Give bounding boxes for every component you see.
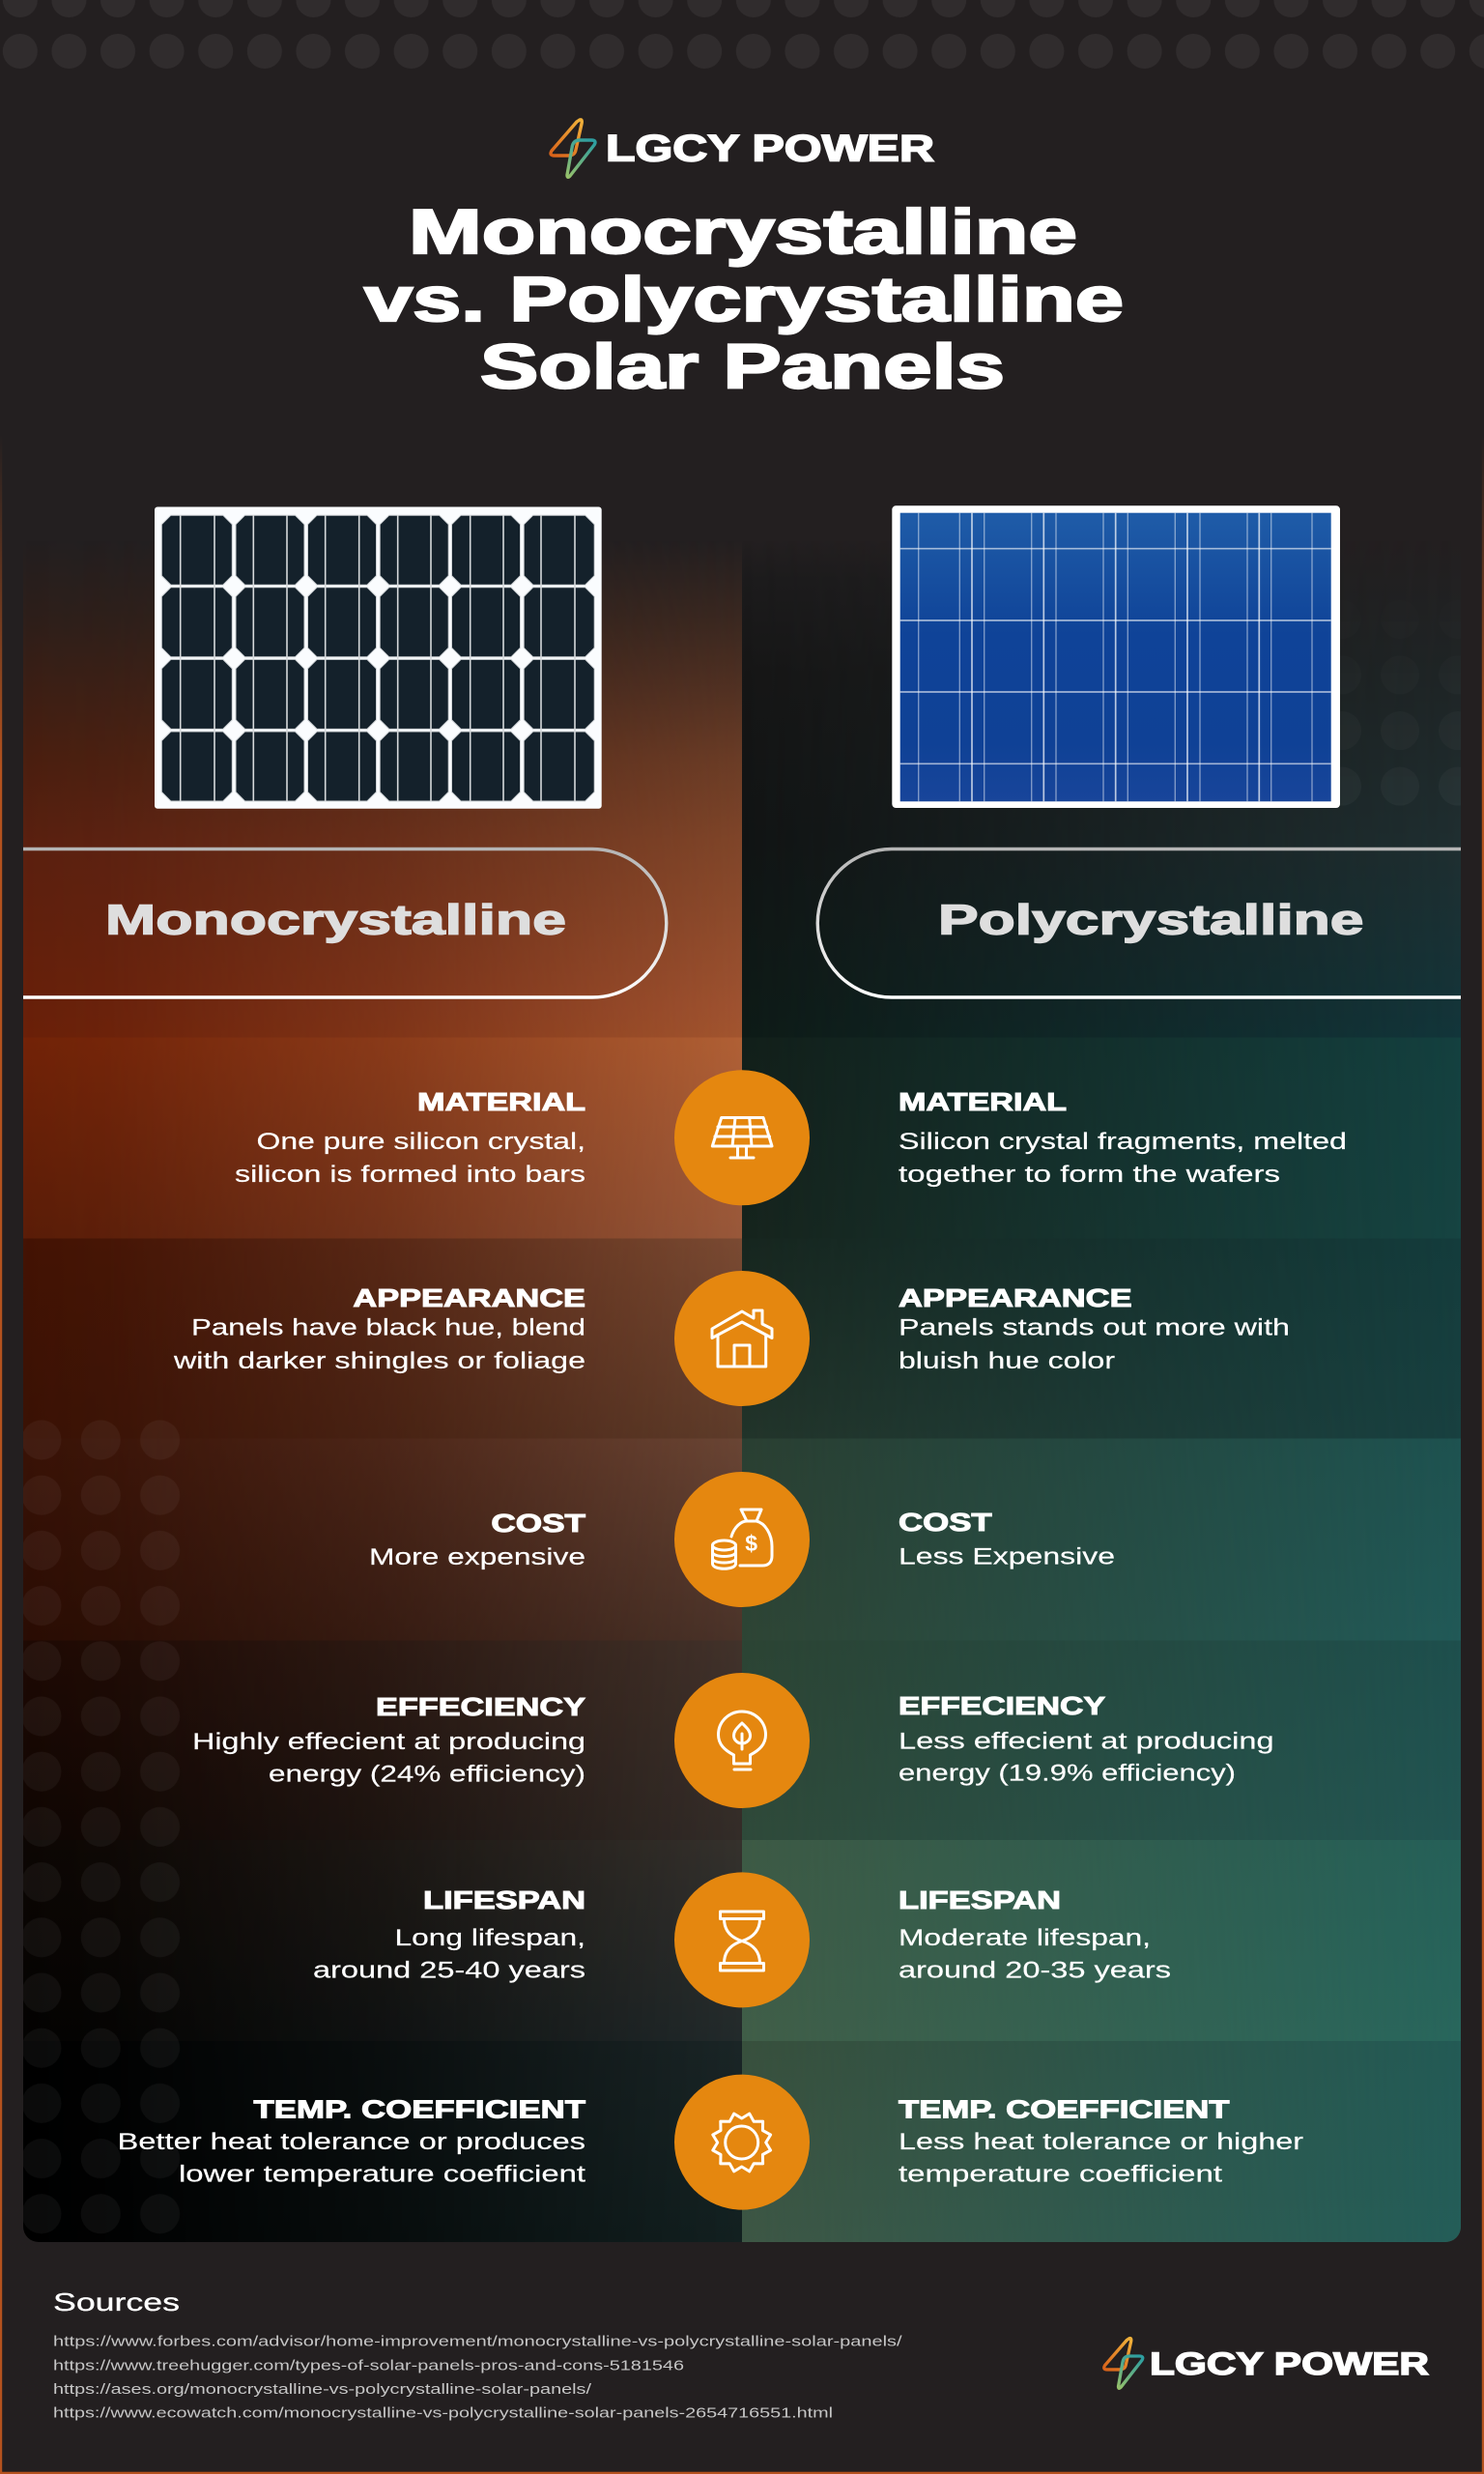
mono lifespan text <box>313 1885 585 1984</box>
mono cost text: More expensive <box>369 1544 585 1570</box>
poly temperature text: Less heat tolerance or higher <box>899 2129 1303 2155</box>
heading pill: polycrystalline <box>817 849 1461 997</box>
sources: https://www.treehugger.com/types-of-solar-panels-pros-and-cons-5181546 <box>53 2357 684 2373</box>
poly appearance text: APPEARANCE <box>899 1283 1132 1312</box>
poly efficiency text: Less effecient at producing <box>899 1728 1274 1755</box>
image: monocrystalline solar panel <box>155 506 602 809</box>
poly appearance text: bluish hue color <box>899 1348 1115 1374</box>
header logo <box>551 120 934 177</box>
mono efficiency text <box>192 1692 585 1788</box>
heading pill: polycrystalline: Polycrystalline <box>938 896 1364 943</box>
sources: https://www.ecowatch.com/monocrystalline-vs-polycrystalline-solar-panels-2654716551.html <box>53 2405 833 2422</box>
heading pill: monocrystalline <box>23 849 667 997</box>
icon: sun gear <box>674 2075 810 2210</box>
icon: house <box>674 1271 810 1406</box>
footer logo: LGCY POWER <box>1150 2345 1429 2381</box>
title: Monocrystalline <box>409 196 1077 267</box>
row: appearance <box>173 1271 1290 1406</box>
icon: money bag and coins: $ <box>745 1531 757 1556</box>
mono temperature text: TEMP. COEFFICIENT <box>253 2095 585 2124</box>
icon: lightning bolt logo <box>551 120 595 177</box>
mono lifespan text: LIFESPAN <box>423 1885 585 1914</box>
mono cost text <box>369 1509 585 1570</box>
row: temperature coefficient <box>118 2075 1303 2210</box>
sources <box>53 2287 903 2422</box>
row: material <box>235 1070 1347 1205</box>
mono material text: MATERIAL <box>417 1087 585 1116</box>
mono material text <box>235 1087 585 1188</box>
decorative dot band <box>0 0 1484 72</box>
row: lifespan <box>313 1872 1171 2007</box>
sources: https://www.forbes.com/advisor/home-improvement/monocrystalline-vs-polycrystalline-solar-panels/ <box>53 2334 903 2350</box>
panel: comparison background <box>23 541 1461 2242</box>
poly temperature text <box>899 2095 1303 2188</box>
title <box>364 196 1124 402</box>
poly temperature text: temperature coefficient <box>899 2162 1222 2188</box>
icon: money bag and coins <box>674 1472 810 1607</box>
mono appearance text: with darker shingles or foliage <box>173 1348 585 1374</box>
poly lifespan text: Moderate lifespan, <box>899 1925 1151 1951</box>
poly cost text: COST <box>899 1508 992 1537</box>
poly lifespan text <box>899 1885 1171 1984</box>
heading pill: monocrystalline: Monocrystalline <box>105 896 566 943</box>
title: vs. Polycrystalline <box>364 264 1124 334</box>
mono lifespan text: around 25-40 years <box>313 1958 585 1984</box>
icon: solar panel <box>674 1070 810 1205</box>
poly temperature text: TEMP. COEFFICIENT <box>899 2095 1230 2124</box>
sources: Sources <box>53 2287 180 2316</box>
footer logo <box>1104 2339 1429 2388</box>
mono efficiency text: EFFECIENCY <box>376 1692 585 1721</box>
image: polycrystalline solar panel <box>892 505 1340 808</box>
poly material text: MATERIAL <box>899 1087 1067 1116</box>
poly material text: Silicon crystal fragments, melted <box>899 1129 1347 1155</box>
poly appearance text <box>899 1283 1290 1374</box>
mono temperature text: Better heat tolerance or produces <box>118 2129 585 2155</box>
title: Solar Panels <box>480 331 1005 402</box>
icon: light bulb with leaf <box>674 1673 810 1808</box>
mono material text: One pure silicon crystal, <box>257 1129 585 1155</box>
icon: hourglass <box>674 1872 810 2007</box>
mono appearance text: APPEARANCE <box>353 1283 585 1312</box>
sources: https://ases.org/monocrystalline-vs-polycrystalline-solar-panels/ <box>53 2381 592 2398</box>
mono temperature text <box>118 2095 585 2188</box>
poly lifespan text: around 20-35 years <box>899 1958 1171 1984</box>
poly material text: together to form the wafers <box>899 1162 1280 1188</box>
row: efficiency <box>192 1673 1274 1808</box>
mono lifespan text: Long lifespan, <box>394 1925 585 1951</box>
poly cost text: Less Expensive <box>899 1544 1115 1569</box>
mono cost text: COST <box>491 1509 585 1538</box>
poly cost text <box>899 1508 1115 1569</box>
header logo: LGCY POWER <box>606 128 934 170</box>
mono material text: silicon is formed into bars <box>235 1162 585 1188</box>
poly efficiency text: energy (19.9% efficiency) <box>899 1761 1236 1786</box>
poly efficiency text: EFFECIENCY <box>899 1691 1105 1720</box>
mono efficiency text: Highly effecient at producing <box>192 1729 585 1755</box>
poly appearance text: Panels stands out more with <box>899 1314 1290 1340</box>
icon: footer lightning bolt logo <box>1104 2339 1143 2388</box>
poly lifespan text: LIFESPAN <box>899 1885 1061 1914</box>
mono temperature text: lower temperature coefficient <box>179 2162 585 2188</box>
mono efficiency text: energy (24% efficiency) <box>269 1761 585 1788</box>
mono appearance text <box>173 1283 585 1374</box>
row: cost <box>369 1472 1115 1607</box>
poly material text <box>899 1087 1347 1188</box>
poly efficiency text <box>899 1691 1274 1786</box>
mono appearance text: Panels have black hue, blend <box>191 1314 585 1340</box>
